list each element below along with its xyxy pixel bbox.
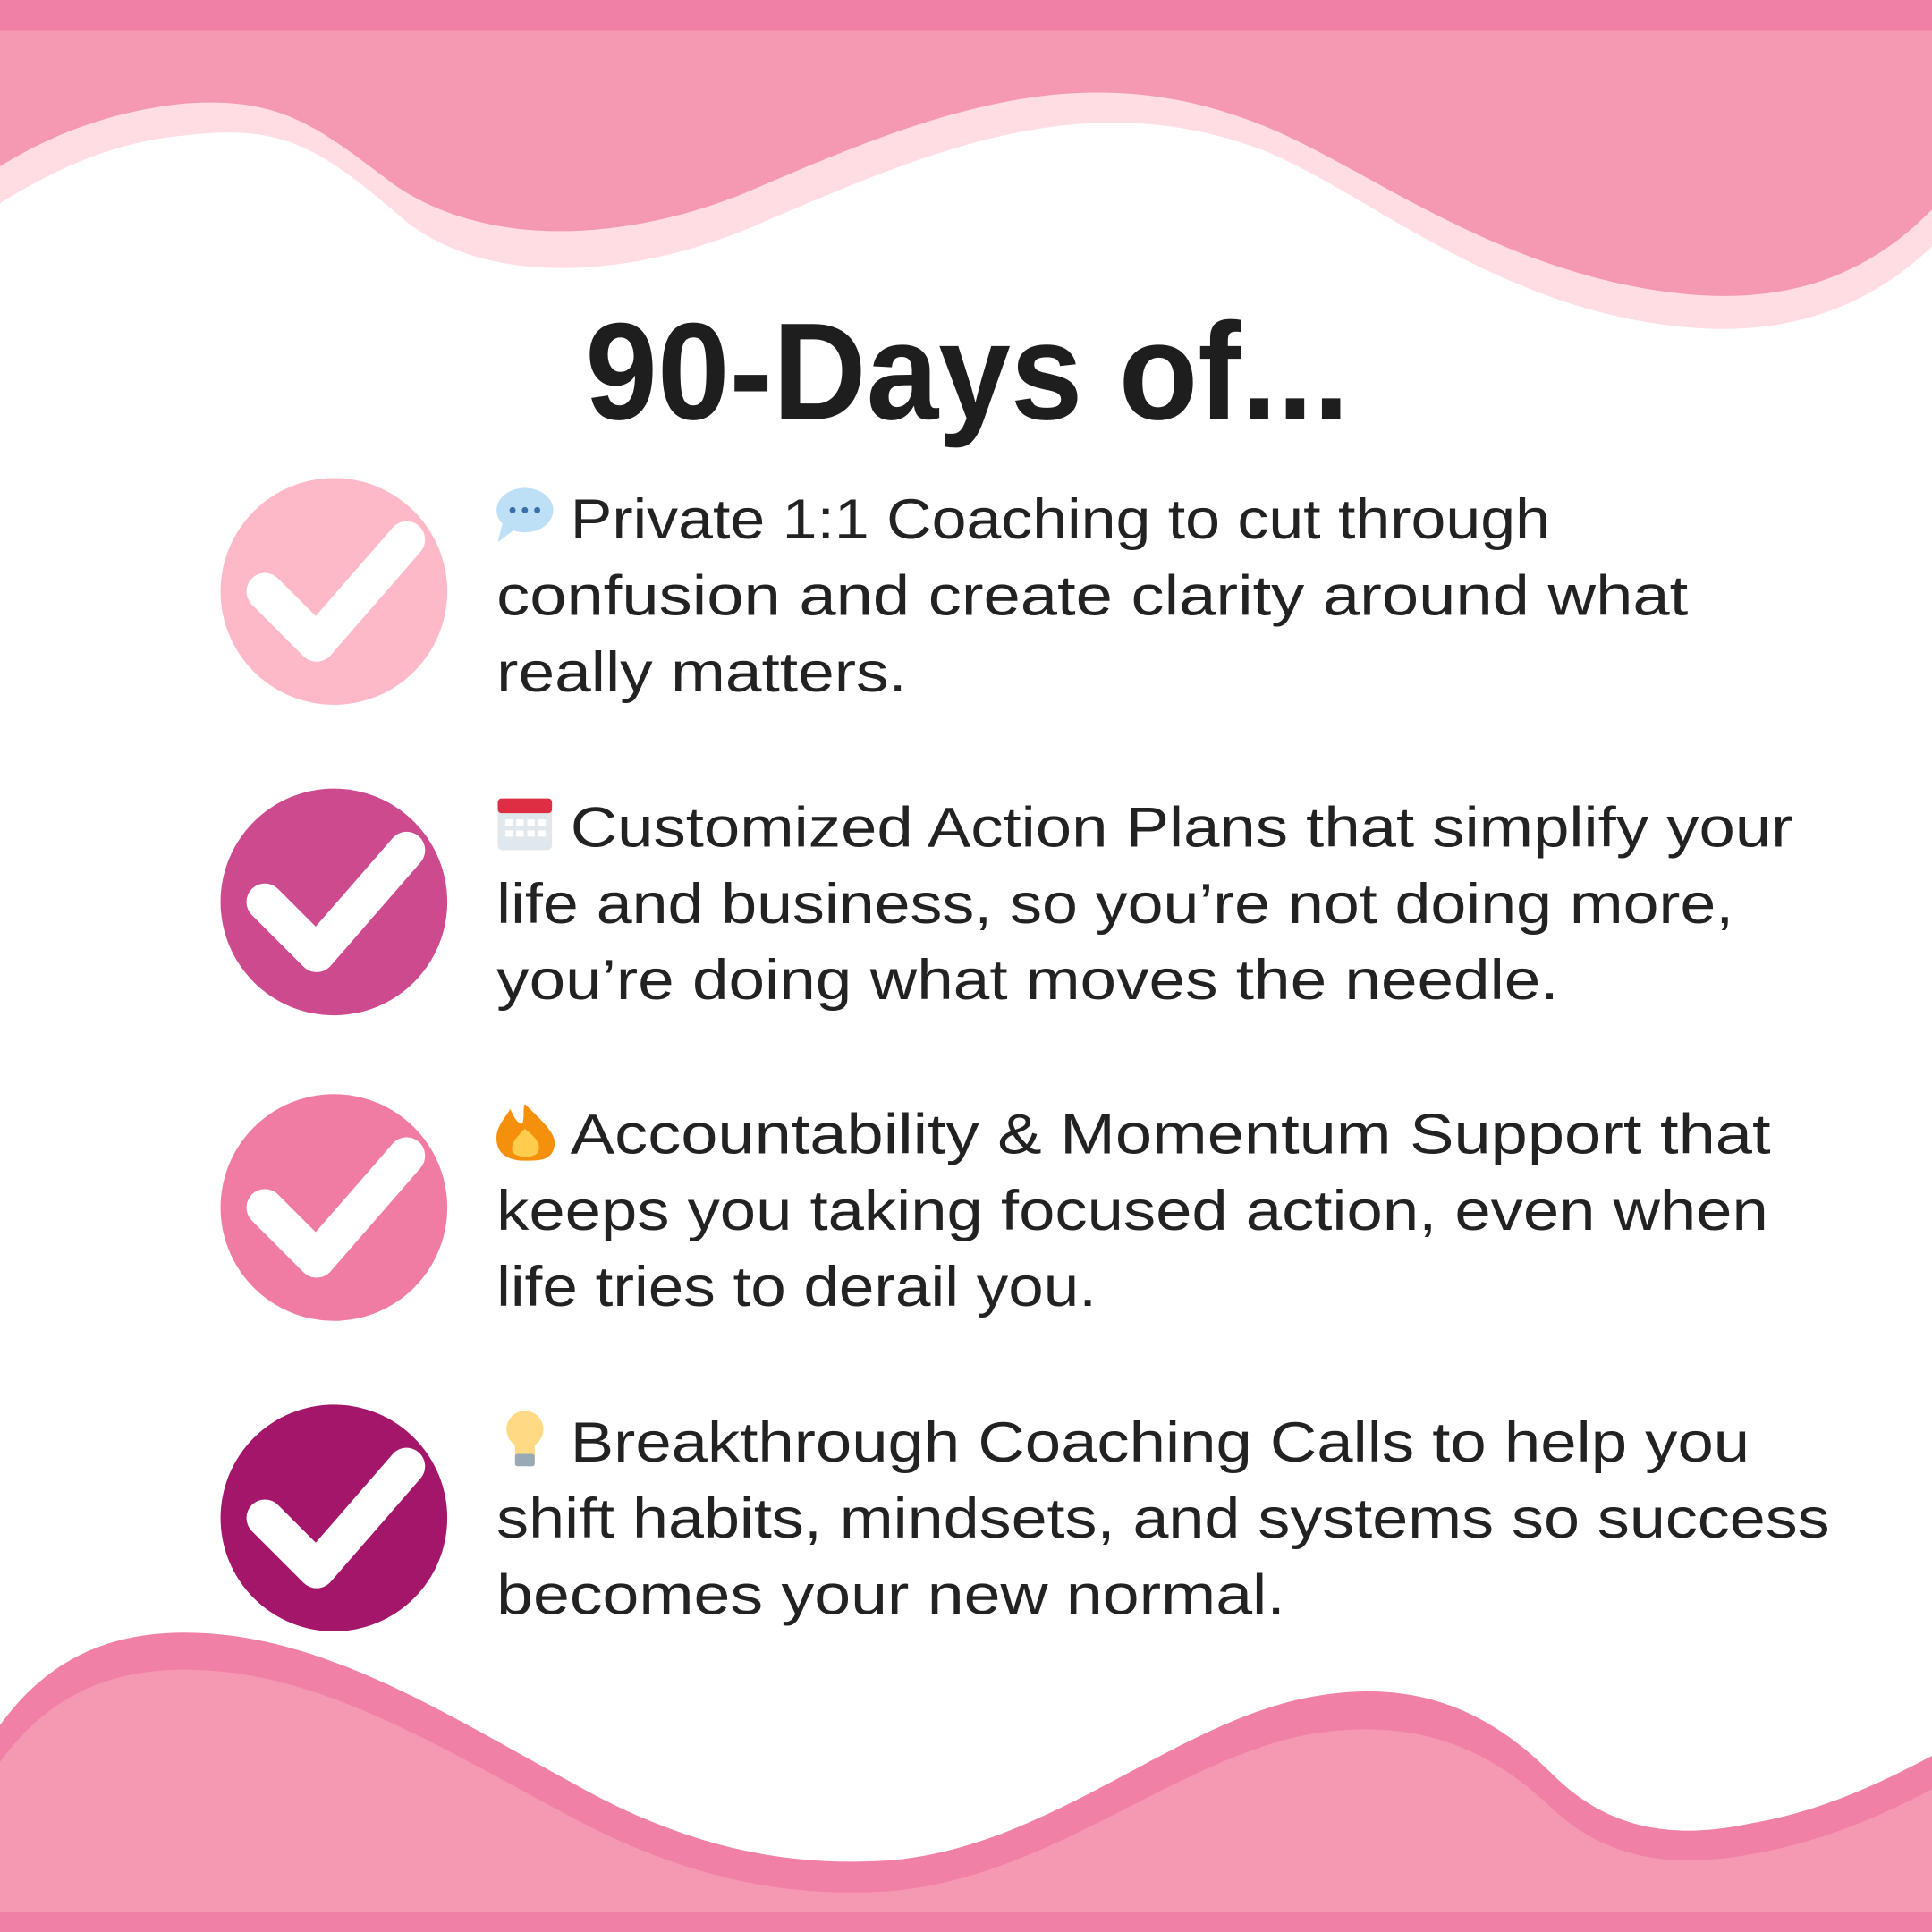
icon: check circle 4 xyxy=(221,1404,447,1631)
icon: speech bubble xyxy=(496,488,554,542)
text block 4: becomes your new normal. xyxy=(496,1564,1285,1627)
text block 2 xyxy=(496,796,1792,1012)
icon: calendar xyxy=(498,799,552,851)
item 1: private coaching xyxy=(221,478,1689,705)
top wave decoration xyxy=(0,0,1932,329)
bottom wave decoration xyxy=(0,1632,1932,1932)
icon: check circle 2 xyxy=(221,789,447,1015)
text block 1: Private 1:1 Coaching to cut through xyxy=(571,488,1550,551)
text block 1: really matters. xyxy=(496,641,907,704)
icon: light bulb xyxy=(506,1411,544,1466)
text block 2: life and business, so you’re not doing more, xyxy=(496,873,1733,936)
text block 3: Accountability & Momentum Support that xyxy=(571,1103,1771,1165)
text block 1 xyxy=(496,488,1689,704)
text block 4 xyxy=(496,1411,1830,1627)
title: 90-Days of... xyxy=(585,293,1349,448)
item 4: breakthrough calls xyxy=(221,1404,1830,1631)
item 3: accountability xyxy=(221,1094,1771,1321)
text block 1: confusion and create clarity around what xyxy=(496,564,1689,627)
text block 3: life tries to derail you. xyxy=(496,1256,1097,1318)
icon: fire xyxy=(496,1104,555,1161)
text block 2: Customized Action Plans that simplify your xyxy=(571,796,1792,859)
text block 2: you’re doing what moves the needle. xyxy=(496,949,1559,1012)
text block 4: shift habits, mindsets, and systems so success xyxy=(496,1487,1830,1550)
icon: check circle 1 xyxy=(221,478,447,705)
item 2: action plans xyxy=(221,789,1792,1015)
icon: check circle 3 xyxy=(221,1094,447,1321)
text block 3 xyxy=(496,1103,1771,1318)
text block 4: Breakthrough Coaching Calls to help you xyxy=(571,1411,1750,1474)
text block 3: keeps you taking focused action, even when xyxy=(496,1180,1768,1242)
